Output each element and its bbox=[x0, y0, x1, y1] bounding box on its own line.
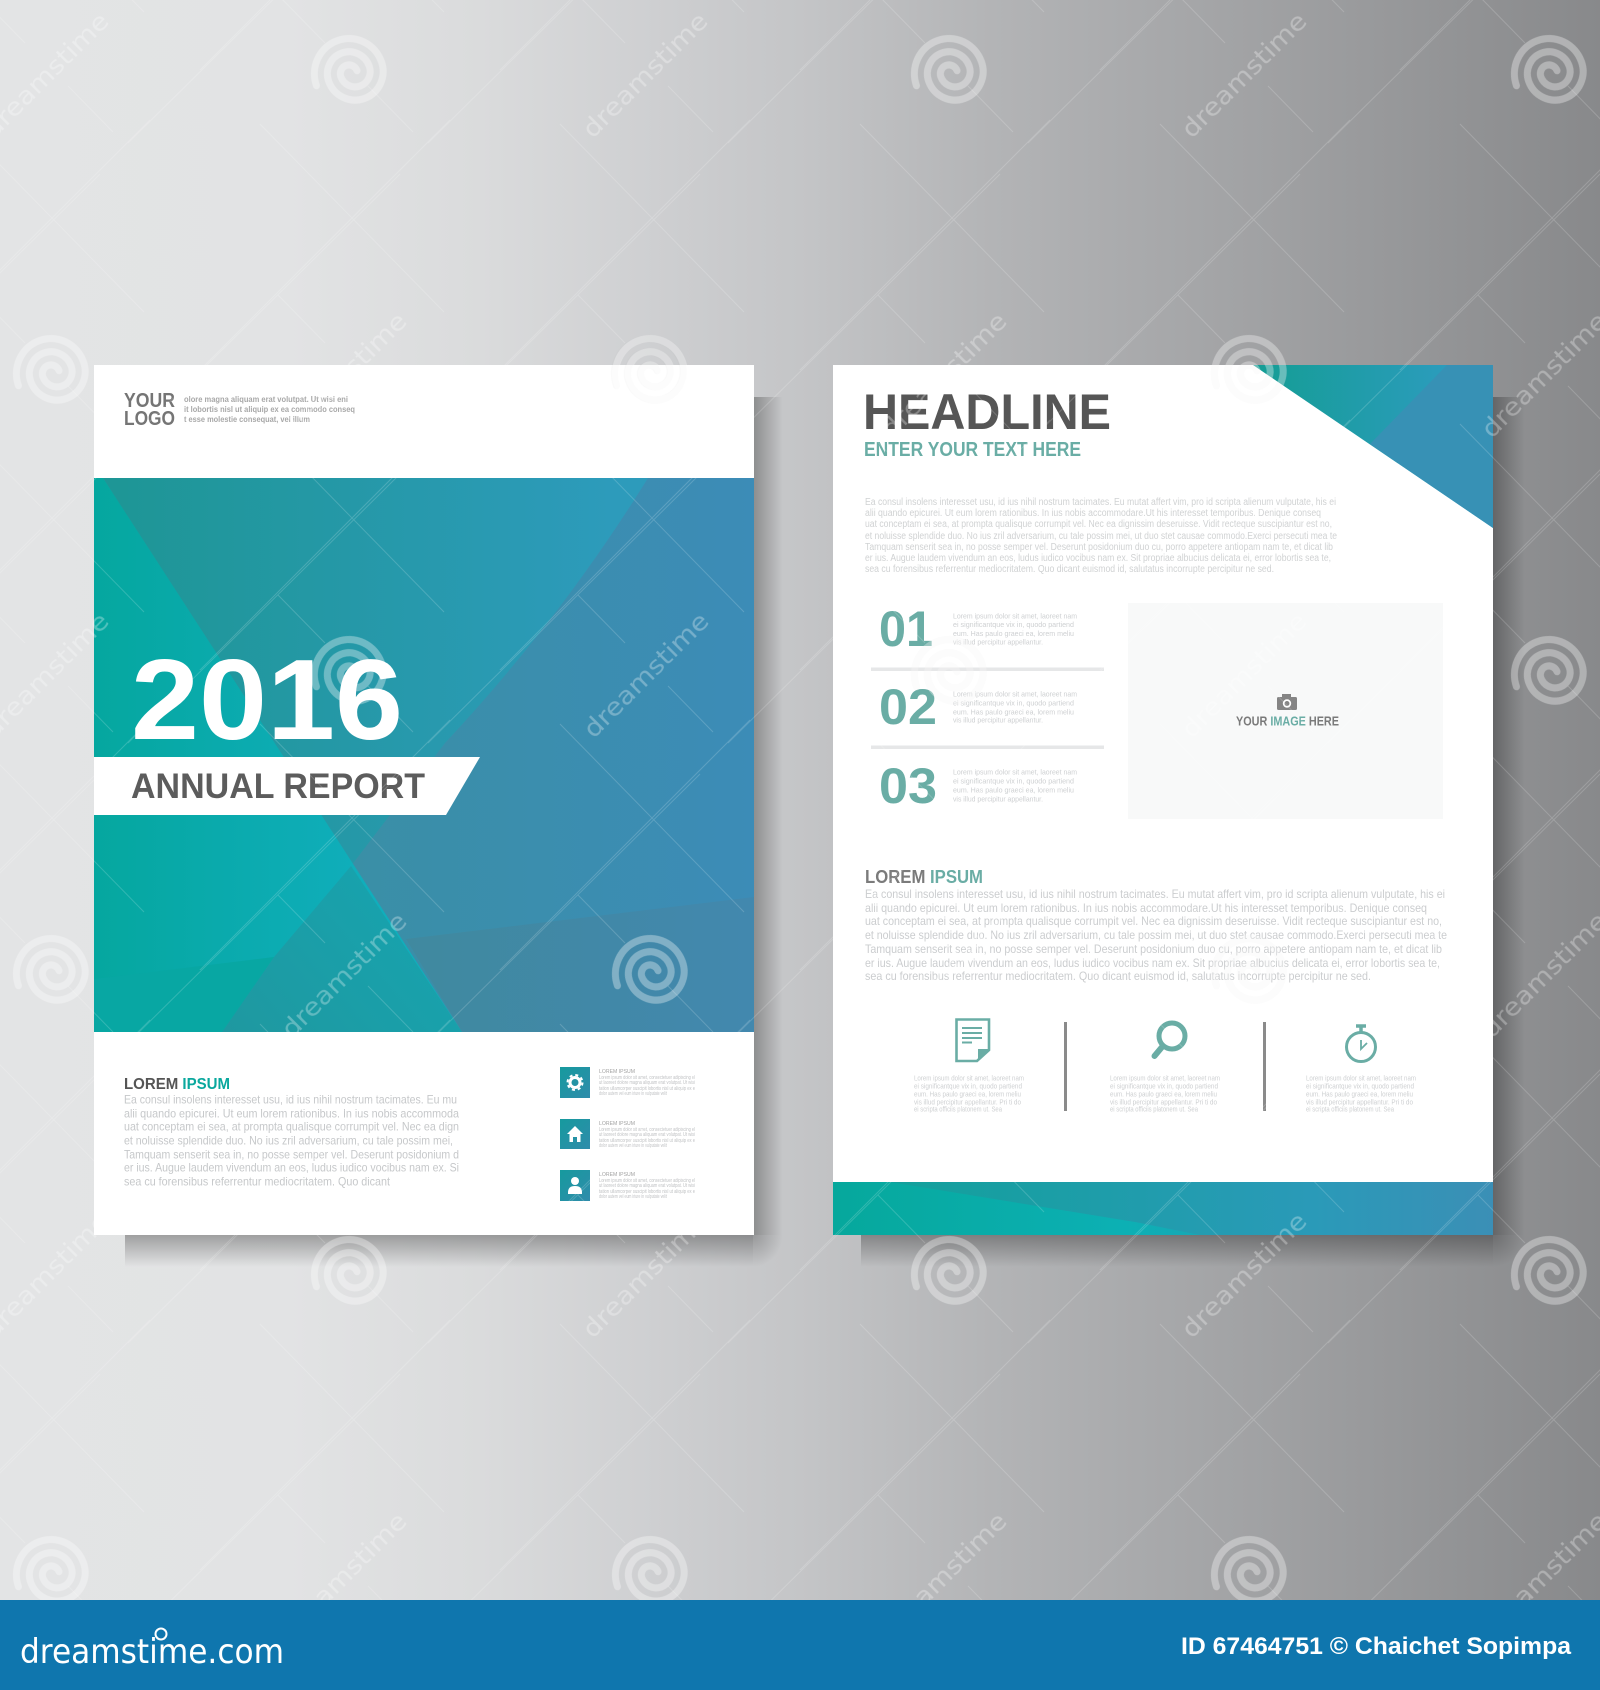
item 02: eum. Has paulo graeci ea, lorem meliu bbox=[953, 708, 1074, 716]
item 03: eum. Has paulo graeci ea, lorem meliu bbox=[953, 786, 1074, 794]
body paragraph: alii quando epicurei. Ut eum lorem rationibus. In ius nobis accommoda bbox=[124, 1106, 459, 1120]
icon list bbox=[560, 1067, 695, 1201]
column text: stopwatch: eum. Has paulo graeci ea, lorem meliu bbox=[1306, 1090, 1413, 1098]
intro paragraph: er ius. Augue laudem vivendum an eos, ludus iudico vocibus nam ex. Sit propriae albucius delicata ei, error lobortis sea te, bbox=[865, 553, 1331, 564]
column text: stopwatch: ei significantque vix in, quodo partiend bbox=[1306, 1082, 1414, 1090]
logo tagline: olore magna aliquam erat volutpat. Ut wisi eni bbox=[184, 395, 348, 404]
logo wordmark bbox=[124, 390, 175, 430]
numbered list bbox=[871, 601, 1104, 814]
intro paragraph: sea cu forensibus referrentur mediocritatem. Quo dicant euismod id, salutatus incorrupte percipitur ne sed. bbox=[865, 564, 1274, 575]
body paragraph: er ius. Augue laudem vivendum an eos, ludus iudico vocibus nam ex. Sit propriae albucius delicata ei, error lobortis sea te, bbox=[865, 956, 1440, 970]
item 02: vis illud percipitur appellantur. bbox=[953, 716, 1043, 724]
column text: document: vis illud percipitur appellantur. Pri ti do bbox=[914, 1098, 1021, 1106]
watermark overlay: dreamstime bbox=[1475, 306, 1600, 444]
heading: LOREM IPSUM bbox=[865, 867, 983, 887]
logo block bbox=[124, 390, 355, 430]
body paragraph: Ea consul insolens interesset usu, id ius nihil nostrum tacimates. Eu mu bbox=[124, 1092, 457, 1106]
intro paragraph bbox=[865, 497, 1337, 575]
watermark overlay: dreamstime bbox=[1475, 906, 1600, 1044]
intro paragraph: et noluisse splendide duo. No ius zril adversarium, cu tale possim mei, ut duo stet causae commodo.Exerci persecuti mea te bbox=[865, 531, 1337, 542]
panel: cover page bbox=[94, 365, 754, 1235]
intro paragraph: Ea consul insolens interesset usu, id ius nihil nostrum tacimates. Eu mutat affert vim, pro id scripta alienum vulputate, his ei bbox=[865, 497, 1336, 508]
annual report ribbon bbox=[94, 757, 480, 815]
list item text: one: dolor autem vel eum iriure in vulputate velit bbox=[599, 1091, 667, 1097]
headline: HEADLINE bbox=[863, 384, 1111, 440]
watermark overlay: dreamstime bbox=[275, 906, 413, 1044]
list item text: two: Lorem ipsum dolor sit amet, consectetuer adipiscing el bbox=[599, 1127, 695, 1133]
list item text: three: dolor autem vel eum iriure in vulputate velit bbox=[599, 1194, 667, 1200]
watermark overlay: dreamstime bbox=[875, 906, 1013, 1044]
icon: user bbox=[560, 1170, 590, 1201]
list item text: two: LOREM IPSUM bbox=[599, 1121, 635, 1127]
watermark overlay: dreamstime bbox=[576, 1206, 714, 1344]
watermark overlay: dreamstime bbox=[1175, 606, 1313, 744]
watermark overlay: dreamstime bbox=[1475, 1506, 1600, 1644]
body paragraph: alii quando epicurei. Ut eum lorem rationibus. In ius nobis accommodare.Ut his interesset temporibus. Denique conseq bbox=[865, 901, 1427, 915]
list item text: two bbox=[599, 1121, 695, 1149]
three feature columns bbox=[914, 1020, 1416, 1114]
body paragraph: Ea consul insolens interesset usu, id ius nihil nostrum tacimates. Eu mutat affert vim, pro id scripta alienum vulputate, his ei bbox=[865, 887, 1445, 901]
item 02: ei significantque vix in, quodo partiend bbox=[953, 698, 1074, 708]
icon: magnifier bbox=[1154, 1023, 1185, 1056]
body paragraph: uat conceptam ei sea, at prompta qualisque corrumpit vel. Nec ea dignissim deseruisse. Vidit recteque suscipiantur est no, bbox=[865, 914, 1442, 928]
watermark overlay: dreamstime bbox=[1175, 1206, 1313, 1344]
column text: stopwatch: vis illud percipitur appellantur. Pri ti do bbox=[1306, 1098, 1413, 1106]
body paragraph: sea cu forensibus referrentur mediocritatem. Quo dicant euismod id, salutatus incorrupte percipitur ne sed. bbox=[865, 969, 1371, 983]
column text: magnifier: ei scripta officiis platonem ut. Sea bbox=[1110, 1104, 1199, 1114]
column text: magnifier: ei significantque vix in, quodo partiend bbox=[1110, 1082, 1218, 1090]
item 03: vis illud percipitur appellantur. bbox=[953, 794, 1043, 804]
column text: document: ei significantque vix in, quodo partiend bbox=[914, 1082, 1022, 1090]
list item text: two: ut laoreet dolore magna aliquam erat volutpat. Ut wisi bbox=[599, 1132, 695, 1138]
watermark overlay: dreamstime bbox=[275, 306, 413, 444]
list item text: one: ut laoreet dolore magna aliquam erat volutpat. Ut wisi bbox=[599, 1080, 695, 1086]
item 01: 01 bbox=[879, 601, 933, 657]
column text: magnifier: eum. Has paulo graeci ea, lorem meliu bbox=[1110, 1090, 1217, 1098]
cover text block bbox=[124, 1076, 459, 1188]
item 02: Lorem ipsum dolor sit amet, laoreet nam bbox=[953, 690, 1077, 698]
footer bar bbox=[0, 1600, 1600, 1690]
list item text: three: Lorem ipsum dolor sit amet, consectetuer adipiscing el bbox=[599, 1178, 695, 1184]
column text: magnifier: vis illud percipitur appellantur. Pri ti do bbox=[1110, 1098, 1217, 1106]
body paragraph: uat conceptam ei sea, at prompta qualisque corrumpit vel. Nec ea dign bbox=[124, 1120, 459, 1134]
column text: stopwatch bbox=[1306, 1074, 1416, 1114]
item 02: 02 bbox=[879, 679, 937, 735]
icon: document bbox=[956, 1020, 989, 1061]
bottom polygon band bbox=[833, 1182, 1493, 1235]
column text: document: Lorem ipsum dolor sit amet, laoreet nam bbox=[914, 1074, 1024, 1082]
list item text: three: tation ullamcorper suscipit lobortis nisl ut aliquip ex e bbox=[599, 1189, 695, 1195]
annual report ribbon: ANNUAL REPORT bbox=[131, 767, 425, 806]
intro paragraph: uat conceptam ei sea, at prompta qualisque corrumpit vel. Nec ea dignissim deseruisse. Vidit recteque suscipiantur est no, bbox=[865, 519, 1332, 530]
list item text: one: tation ullamcorper suscipit lobortis nisl ut aliquip ex e bbox=[599, 1086, 695, 1092]
item 03 bbox=[879, 758, 1077, 814]
panel: inner page bbox=[833, 365, 1493, 1235]
subheading: ENTER YOUR TEXT HERE bbox=[864, 439, 1081, 461]
column text: stopwatch: Lorem ipsum dolor sit amet, laoreet nam bbox=[1306, 1074, 1416, 1082]
image placeholder bbox=[1128, 603, 1443, 819]
list item text: one: LOREM IPSUM bbox=[599, 1069, 635, 1075]
body paragraph: Tamquam senserit sea in, no posse semper vel. Deserunt posidonium d bbox=[124, 1148, 459, 1162]
item 03: ei significantque vix in, quodo partiend bbox=[953, 776, 1074, 786]
icon: gear bbox=[560, 1067, 590, 1098]
list item text: one: Lorem ipsum dolor sit amet, consectetuer adipiscing el bbox=[599, 1075, 695, 1081]
icon: camera bbox=[1277, 694, 1297, 710]
body paragraph bbox=[865, 887, 1447, 983]
body paragraph: er ius. Augue laudem vivendum an eos, ludus iudico vocibus nam ex. Si bbox=[124, 1160, 459, 1174]
list item text: three bbox=[599, 1172, 695, 1200]
lower text block bbox=[865, 867, 1447, 983]
icon: home bbox=[560, 1119, 590, 1149]
watermark overlay: dreamstime bbox=[875, 306, 1013, 444]
body paragraph: sea cu forensibus referrentur mediocritatem. Quo dicant bbox=[124, 1174, 391, 1188]
heading: LOREM IPSUM bbox=[124, 1076, 230, 1093]
image id and credit: ID 67464751 © Chaichet Sopimpa bbox=[1181, 1633, 1572, 1660]
column text: magnifier: Lorem ipsum dolor sit amet, laoreet nam bbox=[1110, 1074, 1220, 1082]
list item text: two: dolor autem vel eum iriure in vulputate velit bbox=[599, 1143, 667, 1149]
footer brand: dreamstime.com bbox=[20, 1632, 284, 1672]
watermark overlay: dreamstime bbox=[576, 6, 714, 144]
logo tagline: t esse molestie consequat, vel illum bbox=[184, 415, 310, 424]
watermark overlay: dreamstime bbox=[1175, 6, 1313, 144]
placeholder caption: YOUR IMAGE HERE bbox=[1236, 714, 1339, 728]
item 01: ei significantque vix in, quodo partiend bbox=[953, 620, 1074, 629]
column text: magnifier bbox=[1110, 1074, 1220, 1114]
item 01: vis illud percipitur appellantur. bbox=[953, 638, 1043, 646]
body paragraph: et noluisse splendide duo. No ius zril adversarium, cu tale possim mei, ut duo stet causae commodo.Exerci persecuti mea te bbox=[865, 928, 1447, 942]
corner polygon artwork bbox=[1253, 365, 1493, 528]
logo wordmark: LOGO bbox=[124, 408, 175, 430]
column text: document bbox=[914, 1074, 1024, 1114]
body paragraph: Tamquam senserit sea in, no posse semper vel. Deserunt posidonium duo cu, porro appetere antiopam nam te, et dicat lib bbox=[865, 942, 1442, 956]
intro paragraph: Tamquam senserit sea in, no posse semper vel. Deserunt posidonium duo cu, porro appetere antiopam nam te, et dicat lib bbox=[865, 542, 1333, 553]
item 01: Lorem ipsum dolor sit amet, laoreet nam bbox=[953, 612, 1077, 620]
item 02 bbox=[879, 679, 1077, 735]
body paragraph: et noluisse splendide duo. No ius zril adversarium, cu tale possim mei, bbox=[124, 1134, 453, 1148]
list item text: three: LOREM IPSUM bbox=[599, 1172, 635, 1178]
intro paragraph: alii quando epicurei. Ut eum lorem rationibus. In ius nobis accommodare.Ut his interesset temporibus. Denique conseq bbox=[865, 508, 1321, 519]
watermark overlay: dreamstime bbox=[875, 1506, 1013, 1644]
polygon artwork band bbox=[94, 478, 754, 1032]
column text: document: ei scripta officiis platonem ut. Sea bbox=[914, 1104, 1003, 1114]
item 03: Lorem ipsum dolor sit amet, laoreet nam bbox=[953, 768, 1077, 776]
year: 2016 bbox=[131, 637, 403, 764]
divider bbox=[1064, 1022, 1067, 1111]
item 01: eum. Has paulo graeci ea, lorem meliu bbox=[953, 629, 1074, 638]
drop shadow: cover page bbox=[125, 397, 783, 1267]
watermark overlay: dreamstime bbox=[577, 606, 715, 744]
list item text: one bbox=[599, 1069, 695, 1097]
item 03: 03 bbox=[879, 758, 937, 814]
body paragraph bbox=[124, 1092, 459, 1188]
list item text: three: ut laoreet dolore magna aliquam erat volutpat. Ut wisi bbox=[599, 1183, 695, 1189]
watermark overlay: dreamstime bbox=[275, 1506, 413, 1644]
logo wordmark: YOUR bbox=[124, 390, 175, 412]
divider bbox=[1263, 1022, 1266, 1111]
item 01 bbox=[879, 601, 1077, 657]
column text: document: eum. Has paulo graeci ea, lorem meliu bbox=[914, 1090, 1021, 1098]
icon: stopwatch bbox=[1346, 1026, 1376, 1062]
column text: stopwatch: ei scripta officiis platonem ut. Sea bbox=[1306, 1104, 1395, 1114]
list item text: two: tation ullamcorper suscipit lobortis nisl ut aliquip ex e bbox=[599, 1138, 695, 1144]
drop shadow: inner page bbox=[861, 397, 1525, 1267]
logo tagline bbox=[184, 395, 355, 424]
logo tagline: it lobortis nisl ut aliquip ex ea commodo conseq bbox=[184, 405, 355, 414]
